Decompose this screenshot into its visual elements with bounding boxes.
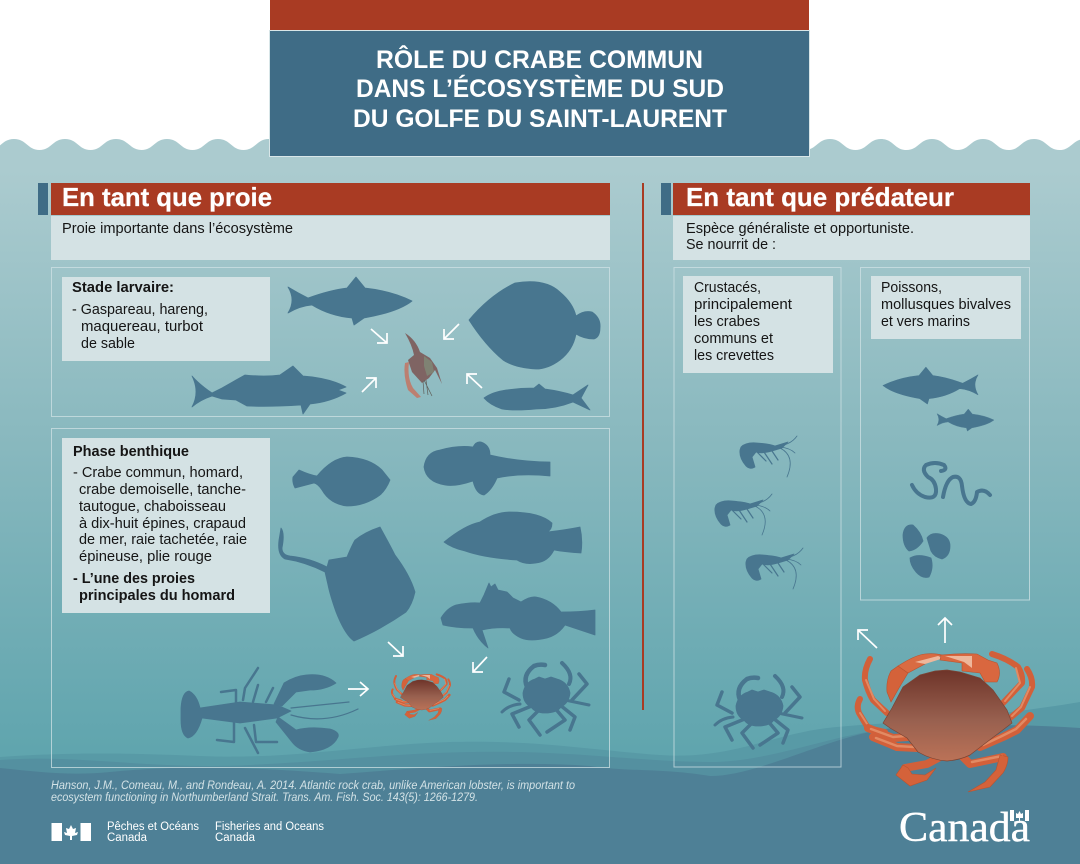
panel: crustaces bbox=[674, 268, 841, 767]
text box: phase benthique: épineuse, plie rouge bbox=[79, 549, 212, 565]
government signature bbox=[52, 821, 324, 844]
text box: stade larvaire bbox=[62, 277, 270, 361]
icon: marine worms bbox=[912, 463, 990, 504]
icon: tanche-tautogue silhouette bbox=[444, 512, 582, 564]
icon: fish silhouette small bbox=[937, 409, 994, 431]
icon: fish silhouette large bbox=[883, 367, 978, 404]
text box: phase benthique: - L’une des proies bbox=[73, 571, 195, 587]
intro box: predateur: Se nourrit de : bbox=[686, 237, 776, 253]
text box: stade larvaire: Stade larvaire: bbox=[72, 280, 174, 296]
title top bar bbox=[270, 0, 809, 30]
department name english bbox=[215, 821, 324, 844]
panel: poissons bbox=[860, 268, 1030, 600]
title text: DANS L’ÉCOSYSTÈME DU SUD bbox=[356, 74, 724, 103]
text box: stade larvaire: maquereau, turbot bbox=[81, 319, 203, 335]
heading: en tant que predateur bbox=[661, 182, 1030, 215]
title banner bbox=[270, 0, 810, 156]
text box: crustaces: Crustacés, bbox=[694, 280, 761, 296]
department name french: Pêches et Océans bbox=[107, 821, 199, 833]
intro box: predateur: Espèce généraliste et opportuniste. bbox=[686, 221, 914, 237]
canada wordmark: Canada bbox=[899, 805, 1030, 851]
panel: stade larvaire bbox=[52, 268, 610, 416]
title text bbox=[353, 44, 727, 133]
icon: homard silhouette bbox=[181, 668, 358, 753]
divider line bbox=[642, 183, 644, 710]
department name english: Canada bbox=[215, 832, 256, 844]
citation: ecosystem functioning in Northumberland Strait. Trans. Am. Fish. Soc. 143(5): 1266-1279. bbox=[51, 792, 478, 804]
heading: en tant que predateur: En tant que prédateur bbox=[686, 182, 954, 212]
text box: phase benthique: - Crabe commun, homard, bbox=[73, 465, 243, 481]
title block bbox=[270, 30, 810, 156]
heading: en tant que proie: En tant que proie bbox=[62, 182, 272, 212]
icon: crab larva bbox=[404, 333, 442, 398]
icon: plie silhouette bbox=[293, 457, 390, 506]
text box: phase benthique: de mer, raie tachetée, raie bbox=[79, 532, 247, 548]
icon: shrimp 3 bbox=[746, 548, 803, 589]
intro box: proie bbox=[51, 216, 610, 260]
text box: poissons bbox=[871, 276, 1021, 339]
arrows: predator bbox=[858, 618, 952, 648]
text box: phase benthique: tautogue, chaboisseau bbox=[79, 499, 226, 515]
arrows: larval predators bbox=[362, 324, 482, 392]
text box: poissons: Poissons, bbox=[881, 280, 942, 296]
panel: phase benthique bbox=[52, 428, 610, 768]
icon: crapaud de mer silhouette bbox=[424, 442, 550, 495]
department name french bbox=[107, 821, 199, 844]
text box: phase benthique: à dix-huit épines, crapaud bbox=[79, 516, 246, 532]
icon: large red crab bbox=[858, 654, 1032, 792]
icon: shrimp 2 bbox=[715, 494, 772, 535]
department name french: Canada bbox=[107, 832, 148, 844]
text box: stade larvaire: - Gaspareau, hareng, bbox=[72, 302, 208, 318]
title text: DU GOLFE DU SAINT-LAURENT bbox=[353, 105, 727, 133]
citation bbox=[51, 780, 576, 804]
icon: turbot silhouette bbox=[469, 282, 600, 369]
text box: crustaces: les crevettes bbox=[694, 348, 774, 364]
icon: shrimp 1 bbox=[740, 436, 797, 477]
text box: crustaces: les crabes bbox=[694, 314, 760, 330]
citation: Hanson, J.M., Comeau, M., and Rondeau, A. 2014. Atlantic rock crab, unlike American lobster, is important to bbox=[51, 780, 576, 792]
icon: bivalve shells bbox=[903, 525, 950, 577]
department name english: Fisheries and Oceans bbox=[215, 821, 324, 833]
icon: herring silhouette bbox=[288, 277, 412, 325]
heading: en tant que proie bbox=[38, 182, 610, 215]
text box: phase benthique: crabe demoiselle, tanche- bbox=[79, 482, 246, 498]
icon: crab silhouette bbox=[715, 676, 802, 748]
icon: small fish silhouette bbox=[484, 384, 590, 410]
text box: stade larvaire: de sable bbox=[81, 336, 135, 352]
icon: small red crab bbox=[392, 674, 450, 720]
text box: crustaces bbox=[683, 276, 833, 373]
title text: RÔLE DU CRABE COMMUN bbox=[376, 44, 703, 74]
intro box: proie: Proie importante dans l’écosystème bbox=[62, 221, 293, 237]
arrows: benthic predators bbox=[348, 642, 487, 696]
text box: crustaces: principalement bbox=[694, 297, 792, 313]
text box: crustaces: communs et bbox=[694, 331, 773, 347]
icon: raie silhouette bbox=[279, 527, 415, 641]
icon: crab silhouette bbox=[502, 663, 589, 735]
icon: chaboisseau silhouette bbox=[441, 583, 595, 648]
text box: poissons: et vers marins bbox=[881, 314, 970, 330]
text box: phase benthique bbox=[62, 438, 270, 613]
text box: phase benthique: Phase benthique bbox=[73, 444, 189, 460]
icon: canadian flag bbox=[52, 823, 91, 841]
intro box: predateur bbox=[673, 216, 1030, 260]
text box: phase benthique: principales du homard bbox=[79, 588, 235, 604]
text box: poissons: mollusques bivalves bbox=[881, 297, 1011, 313]
sea floor waves bbox=[0, 702, 1080, 864]
icon: mackerel silhouette bbox=[192, 366, 346, 414]
